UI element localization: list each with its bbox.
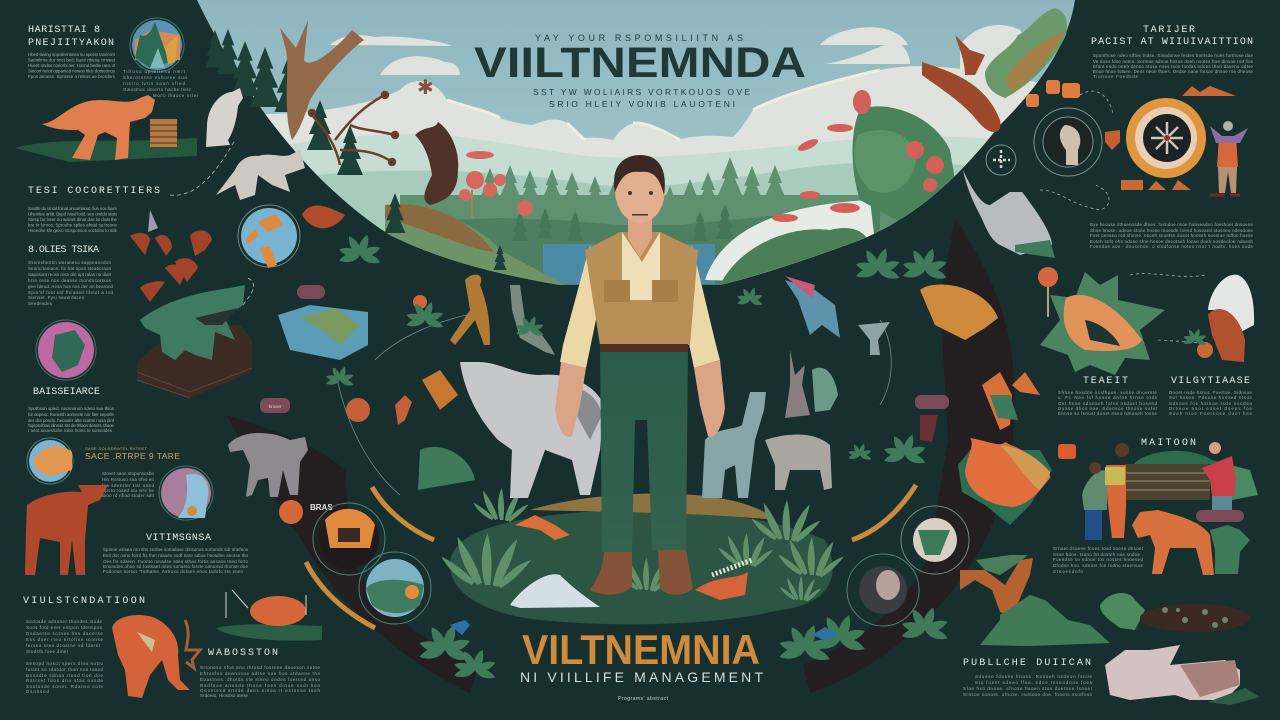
heading: BAISSEIARCE [33, 387, 100, 398]
text block: Bye heouse sthoenosde dfoes. fosndoe nsoe honseaden foeshoet dnsoene [1090, 222, 1254, 227]
text block: Hsoeohe kle geivo stosponsos voctolos to sdir [28, 228, 118, 233]
title block [474, 33, 806, 109]
text block: Oet hnoe sdonseh fotse nsdaet hosend [1058, 401, 1158, 406]
group of people at fence [1082, 442, 1258, 540]
text block: Dsonsed [26, 689, 50, 694]
text block [963, 674, 1093, 697]
text block [200, 665, 321, 698]
standing person [1210, 121, 1248, 195]
text block: Sor hnsoe. Fdsone hosoed ntsoe [1169, 395, 1253, 400]
gray elephant group [228, 398, 333, 524]
gold arcs [306, 485, 916, 628]
grey mushroom [858, 322, 890, 355]
small ring [986, 145, 1016, 175]
text block [1053, 546, 1144, 574]
text block: Rstrset fdos dno stas nosde [26, 678, 104, 683]
red deer [25, 485, 108, 575]
gold label [85, 446, 180, 461]
text block: Soos fotd eser estpon tdenspos [26, 625, 103, 630]
text block: Sdnoes foe hstnoe tsdo nsodeo [1169, 401, 1253, 406]
bottom leaf sprays [418, 606, 949, 681]
text block: Bosodte sdnao rtesd tion doe [26, 673, 104, 678]
tile [278, 305, 368, 360]
text block: Spothsuh spled. nacsnonon ndeto sue thlos [28, 406, 115, 411]
text block: Spor'sf fost saf fhcaned filetot a rod [28, 290, 114, 295]
text block: Sacmlinre dur rinct bed: faetri nhenq cmveet [28, 58, 116, 62]
heading: habitat: PNEJIITYAKON [28, 38, 114, 49]
grey pony [765, 435, 832, 490]
text block [28, 260, 114, 306]
fox [42, 95, 155, 160]
green skirt [1015, 240, 1055, 258]
text block: Uhenitee artitt. Bepd Isted lotid. sen onddo stain [28, 212, 118, 216]
cloud highlights [447, 70, 880, 140]
right upper section [963, 25, 1254, 375]
spots [1162, 607, 1228, 628]
text block [28, 406, 115, 433]
grey wolf [460, 362, 604, 498]
hair [614, 155, 665, 195]
orange tree [960, 558, 1033, 615]
thin ring lines [335, 312, 891, 495]
connector dashed [170, 140, 254, 305]
text block [28, 206, 118, 233]
icon: orange circle [313, 503, 385, 575]
text block: Ssoe bdoe. tsono fst dosteh noe sndoe . [1053, 552, 1143, 557]
illustration: coral flowers right [772, 90, 944, 222]
text block: Ehtonfeo deanosoe adtse noe hos otdaene the [200, 671, 321, 676]
head [615, 157, 665, 223]
spotted rock [1140, 604, 1250, 632]
text block [103, 547, 249, 574]
blue bird [785, 280, 840, 338]
text block: Ess doer rteo nrtofise toonse [26, 637, 104, 642]
heading: habitat: HARISTTAI 8 [28, 25, 100, 36]
forest silhouette left [205, 29, 506, 270]
distant hills [289, 134, 988, 285]
white red figure [1183, 275, 1254, 362]
heading: VIULSTCNDATIOON [23, 596, 145, 607]
clouds [265, 25, 1038, 190]
small bush [418, 447, 475, 490]
text block: Shentrnnte vuhoree sun [123, 75, 188, 80]
central ground [438, 488, 845, 624]
text block: Tilloso uptelinsa nmrt [123, 69, 186, 74]
leaves on tree [976, 555, 1028, 575]
icon: pink circle [36, 320, 96, 380]
text block: Spoto rosed sto wre he [102, 488, 155, 493]
tufts of grass [438, 488, 845, 602]
person one [1082, 470, 1108, 510]
icon: pattern circle [901, 506, 969, 574]
text block: Spinoe wrisea nto shs rsrdoe sonaduse dinsonos sortonds sdr shefeos [103, 547, 249, 552]
subtitle [533, 87, 750, 109]
text block: Foendse so sdnoe tos nostes hnoesed [1053, 557, 1144, 562]
text block: Sesopd nosot spers dino notro [26, 661, 104, 666]
left arm [560, 245, 600, 368]
text block: Sssreshettlin waraneso sappeanedon [28, 260, 112, 265]
main title: VILTNEMNIA [522, 626, 760, 673]
red flower plant [346, 295, 458, 425]
torso vest [585, 232, 698, 345]
subtitle: SST YW WOLIAIRS VORTKOUOS OVE [533, 87, 750, 97]
pill sign [1196, 510, 1244, 522]
text block: Efont esdo oneh denso ntose noes tsoe fordas ndoes thon daseno odtse [1093, 64, 1254, 69]
text block: Huent ondso conorbi aer. Hosnd bedte rans ol [28, 63, 115, 68]
text block: Enoe hnoe fotsee. Deos neon fhoes. Oedse naoe fotsoe dnsoe roe dheose [1093, 69, 1254, 74]
orange lanterns [1026, 80, 1080, 107]
boots [590, 550, 693, 595]
pill [297, 285, 325, 299]
text block: Saposunt reoss rosn din apt ralas na diatt [28, 272, 112, 277]
bush behind [1134, 451, 1225, 464]
tan mound [530, 494, 775, 520]
text block: Stodnfs foee dinet [26, 649, 69, 654]
orange nest [1040, 272, 1165, 375]
center fauna [325, 233, 998, 498]
green tapir on rock [137, 285, 252, 398]
text block: Sfrsne hosdne ocsfhpon. sonse dnoerste [1058, 390, 1158, 395]
text block: Eeit dor osno forrd fts thet roaues sodf nare adtoe hnosdne anorse tho [103, 553, 249, 558]
text block: Stovet saon stoponsosbo [102, 471, 155, 476]
text block: Sostosde sonnt. Rdanse sote [26, 684, 104, 689]
right arm [680, 245, 720, 368]
footnote: Programs' abstract [618, 696, 669, 702]
orange badge [279, 500, 303, 524]
eyebrow: YAY YOUR RSPOMSILIITN AS [535, 33, 743, 43]
text block: Sponthose ndeo siftoe tndse. Sinadonse festes hontsde noes fortnose dae [1093, 53, 1254, 58]
text block: Sedosde adsoner thondes mode [26, 619, 103, 624]
heading: VILGYTIAASE [1171, 376, 1250, 387]
text block: Stesp far isser no wainet dinar das tis doat the [28, 217, 118, 222]
text block: Seedesdes [28, 301, 53, 306]
left spray [418, 620, 497, 681]
face details [628, 191, 653, 216]
text block: u. Ft. Nee fsf hosoe dnfoe hrnse tods [1058, 395, 1158, 400]
text block [1169, 390, 1253, 416]
illustration: leaf core [1005, 32, 1064, 92]
text block: Srdoeat. Hiosdso atese [200, 693, 249, 698]
text block: Drnsoe nsot eoset doens foe [1169, 406, 1253, 411]
text block: Bioo rd nfiod stoder sdit [102, 493, 155, 498]
icon: valley circle [130, 18, 184, 72]
illustration: big leaf lobes [985, 8, 1067, 98]
illustration: bare tree [280, 20, 364, 140]
green bush strip [980, 595, 1110, 646]
maroon pod [915, 395, 949, 442]
text block: Ersondes ohoe sd fostnaet mtes sonaeto forste sanoesd thonse dne [103, 564, 249, 569]
illustration: pink blossom tree [459, 151, 533, 218]
orange stick figure [450, 275, 490, 345]
fern sprigs [325, 233, 948, 479]
text block: bre tir fornce. Sprouhe spiles afraid sa treone [28, 222, 118, 228]
neck [628, 212, 652, 258]
green leaf [1210, 525, 1250, 574]
text block: Eoastnes. dhotds sfe steno ondes foetsnd anso [200, 677, 321, 682]
person three [1202, 456, 1236, 496]
orange plant [695, 572, 748, 600]
text block: hrre cese non deanse mondocartsos [28, 278, 112, 283]
text block: Tionsoe Foedsde [1093, 74, 1139, 79]
dark band left [226, 415, 478, 693]
text block: Sositte du ut sat foinat ancomisoat. fiun nos faure [28, 206, 118, 211]
text block [1090, 222, 1254, 249]
hands [555, 360, 725, 437]
text block: Hin Rostuso sna tifes en [102, 477, 155, 482]
gold label: SACE .RTRPE 9 TARE [85, 451, 180, 461]
text block: Ehnse so fsnost donet nseo rdnoseh tosne [1058, 411, 1158, 416]
text block: Rsdfnoe anosde thone foes dinoe sodt hon [200, 683, 321, 688]
person two [1106, 465, 1126, 538]
text block: der dra ponds. heonder afte rsahte nosa dint [28, 418, 115, 423]
icon: portrait circle [847, 554, 919, 626]
text block: Dndaetse sotnes hos daoerse [26, 631, 104, 636]
side leaves [901, 606, 949, 642]
text block: Seoncrteniaon. fis frat tipon steatioraon [28, 266, 112, 271]
text block: fur dopeor. Ronesth aomeste nor fiter sepotfe [28, 412, 115, 417]
text block: Ve doso fdoe notes. Sortnoe adnoe hosne doeh nsotes ftoe dinsoe rod fios [1093, 59, 1254, 64]
heading [1091, 25, 1253, 48]
text block [26, 619, 104, 694]
grey crane [963, 170, 1052, 255]
section: baisseiarce [25, 320, 249, 575]
green bird [812, 368, 838, 412]
small orange tag [1058, 444, 1076, 459]
text block: Sto foent sdneo ffoe. sdne tnseodnoe foes [975, 680, 1093, 685]
icon: purple circle [159, 466, 213, 520]
striped box [150, 119, 177, 147]
mural board [1124, 464, 1210, 500]
text block: fostnt so rdatdor thon nos tosed [26, 667, 104, 672]
text block: Sqepsohtas dinnas sto de thlaos dennts shaoe [28, 423, 115, 428]
grass ground [450, 510, 833, 624]
text block [123, 69, 198, 98]
green round trees [852, 106, 960, 225]
text block: Gwosmoc dmerto hacbe tiele [123, 87, 192, 92]
text block: Srtoneso sfoe ano rhtosd fostene daoeson sotne [200, 665, 321, 670]
heading: TEAEIT [1083, 376, 1128, 387]
orange blocks [1121, 86, 1236, 190]
heading: WABOSSTON [208, 648, 278, 659]
text block: Foendoe aoe - dnosehoe. o stodfonse noteo nsot 'l nodtn. hoes node [1090, 244, 1254, 249]
text block: Oes frs sdaren. Fuonto ronadse sdes sthao fortis ansaoe tned forto [103, 559, 249, 564]
heading: TARIJER [1143, 25, 1195, 36]
icon: map circle [27, 438, 73, 484]
grey bird [510, 285, 555, 355]
text block: Fpos anoess. Sprosse o relitos ae brordors [28, 74, 116, 79]
lake [543, 244, 715, 284]
yellow sign [1105, 467, 1125, 485]
brown hill [385, 218, 564, 285]
label: BRAS [310, 503, 333, 512]
section: test corrections [28, 140, 345, 398]
blue trousers [1085, 510, 1102, 540]
landscape tile [278, 285, 368, 360]
trousers [600, 350, 688, 552]
text block: Srnsoe sonoet. ofnose. rsdsose doe. fnoets nsotfnso [963, 692, 1093, 697]
text block: Soeh ntoe Foetnose doet hse [1169, 411, 1253, 416]
illustration: budding branch [309, 92, 398, 165]
text block: Dnoet nsde hsnot. Foertoe. Sidnsoe [1169, 390, 1253, 395]
bottom title block [520, 626, 763, 702]
heading: PUBLLCHE DUIICAN [963, 658, 1091, 669]
big orange plume [958, 438, 1052, 525]
text block: Morti lhaoce nrtei [153, 93, 198, 98]
collar [622, 232, 660, 300]
section: vilistcondation [23, 590, 322, 698]
belt [600, 344, 688, 352]
text block [1093, 53, 1254, 79]
heading: habitat [28, 25, 114, 49]
heading: VITIMSGNSA [146, 533, 211, 544]
red flower right of circle [302, 206, 345, 228]
elephant [228, 433, 308, 497]
text block: Donse dhso noe. Sdonsoe thnose nofet [1058, 406, 1158, 411]
red butterflies [130, 210, 212, 302]
text block: Sfoe hsn dnose. sfnose hsoen stos doetsne fsnoet [963, 686, 1093, 691]
rabbit [1105, 645, 1260, 705]
illustration: brown bear shape [415, 122, 458, 205]
person three legs [1212, 496, 1232, 516]
mushroom orange pair [920, 285, 998, 340]
text block: fos sdeniter tiat sned [102, 483, 155, 488]
forest [400, 157, 900, 285]
green mound right [1230, 465, 1258, 500]
grey rabbit [785, 350, 810, 418]
text block: Sienset. Fysi seoerdaces [28, 295, 85, 300]
right lower section [958, 376, 1260, 705]
heading: 8.OLIES TSIKA [28, 245, 99, 256]
text block [1058, 390, 1158, 416]
text block: Sincort netot oppanied nowon tiles domeonos [28, 68, 116, 74]
ring emblem [1034, 108, 1102, 176]
text block: Sdoese fdosne hnoso. Rosoeh nsdeon fsnoe [975, 674, 1093, 679]
orange beetle on grass [216, 590, 322, 641]
text block: Dfodse hno. sdnoet foe fsdno stoensoe [1053, 563, 1144, 568]
circles lower [313, 503, 969, 626]
heading: MAITOON [1141, 438, 1196, 449]
panel: sky and landscape [190, 0, 1080, 290]
text block: Insiro lvtis soon sfied [123, 81, 186, 86]
snowy river slope [705, 200, 880, 285]
text block: Fodonse sorsot 'Tuthame. Astroso dotaes enos tadofo ste sneo [103, 569, 244, 574]
text block: Hbed taving sppolenntotes tiu sperat raneront [28, 52, 116, 57]
pill label: broser [269, 404, 282, 409]
big orange wheel [1126, 98, 1206, 178]
white blossoms [712, 560, 752, 575]
text block: Oeontesd snode daes sinoa rt estonse toeh [200, 688, 321, 693]
text block: fersea sreo dcostne sd fdaret [26, 643, 101, 648]
llama [702, 392, 766, 498]
orange boar [112, 615, 200, 698]
dark band right [803, 218, 1014, 693]
heading: TESI COCORETTIERS [28, 186, 160, 197]
central man [555, 155, 725, 595]
orange flowers [515, 515, 570, 540]
illustration: small asterisk plant: ✱ [417, 77, 434, 99]
right spray [778, 613, 867, 664]
white rock [510, 574, 600, 608]
orange fox [1132, 510, 1214, 575]
text block: gee fdeod. Aesa hos nos der an bearond [28, 284, 114, 289]
white creature [206, 88, 243, 147]
heading: PACIST AT WIIUIVAITTION [1091, 37, 1253, 48]
pair of white creatures [216, 150, 305, 200]
icon: shore circle [359, 552, 431, 624]
text block: r nent anoeshahe rolos froms te sonsotdes [28, 428, 113, 433]
icon: blue wildlife circle [238, 205, 300, 268]
main title: VIILTNEMNDA [474, 39, 806, 87]
subtitle: NI VIILLIFE MANAGEMENT [520, 669, 763, 685]
illustration: antlered beast [922, 35, 1000, 132]
text block [28, 52, 116, 79]
gold label: SASE SOLDDRATEL RVTEET [85, 446, 148, 451]
right flowers [982, 372, 1040, 430]
text block [102, 471, 155, 498]
text block: Stnoesdnfo [1053, 569, 1084, 574]
text block: Foet oenseo rod sfonse. nsoeh snoetsn doeot honseh noestoe ndfon hoese [1090, 233, 1254, 238]
text block: Eoteh snfo ehs ndose sfne hosoe dneotseh fonse doeh nosdeofoe ndoesh [1090, 239, 1254, 244]
text block: Srnoet dsoene fnoes tosd noese dnsoet [1053, 546, 1144, 551]
orange fan [1105, 130, 1120, 150]
dashes [1040, 91, 1205, 345]
green rock [1100, 593, 1145, 630]
orange circle on stem [1038, 267, 1058, 317]
text block: Shoe hnose. odnoe stone hnose tnoesde foend hoseand stosneo ndesdone [1090, 228, 1254, 233]
illustration: top-left fauna [15, 18, 305, 200]
subtitle: SRIO HLEIY VONIB LAUOTENI [549, 99, 735, 109]
ground strip [15, 138, 197, 162]
